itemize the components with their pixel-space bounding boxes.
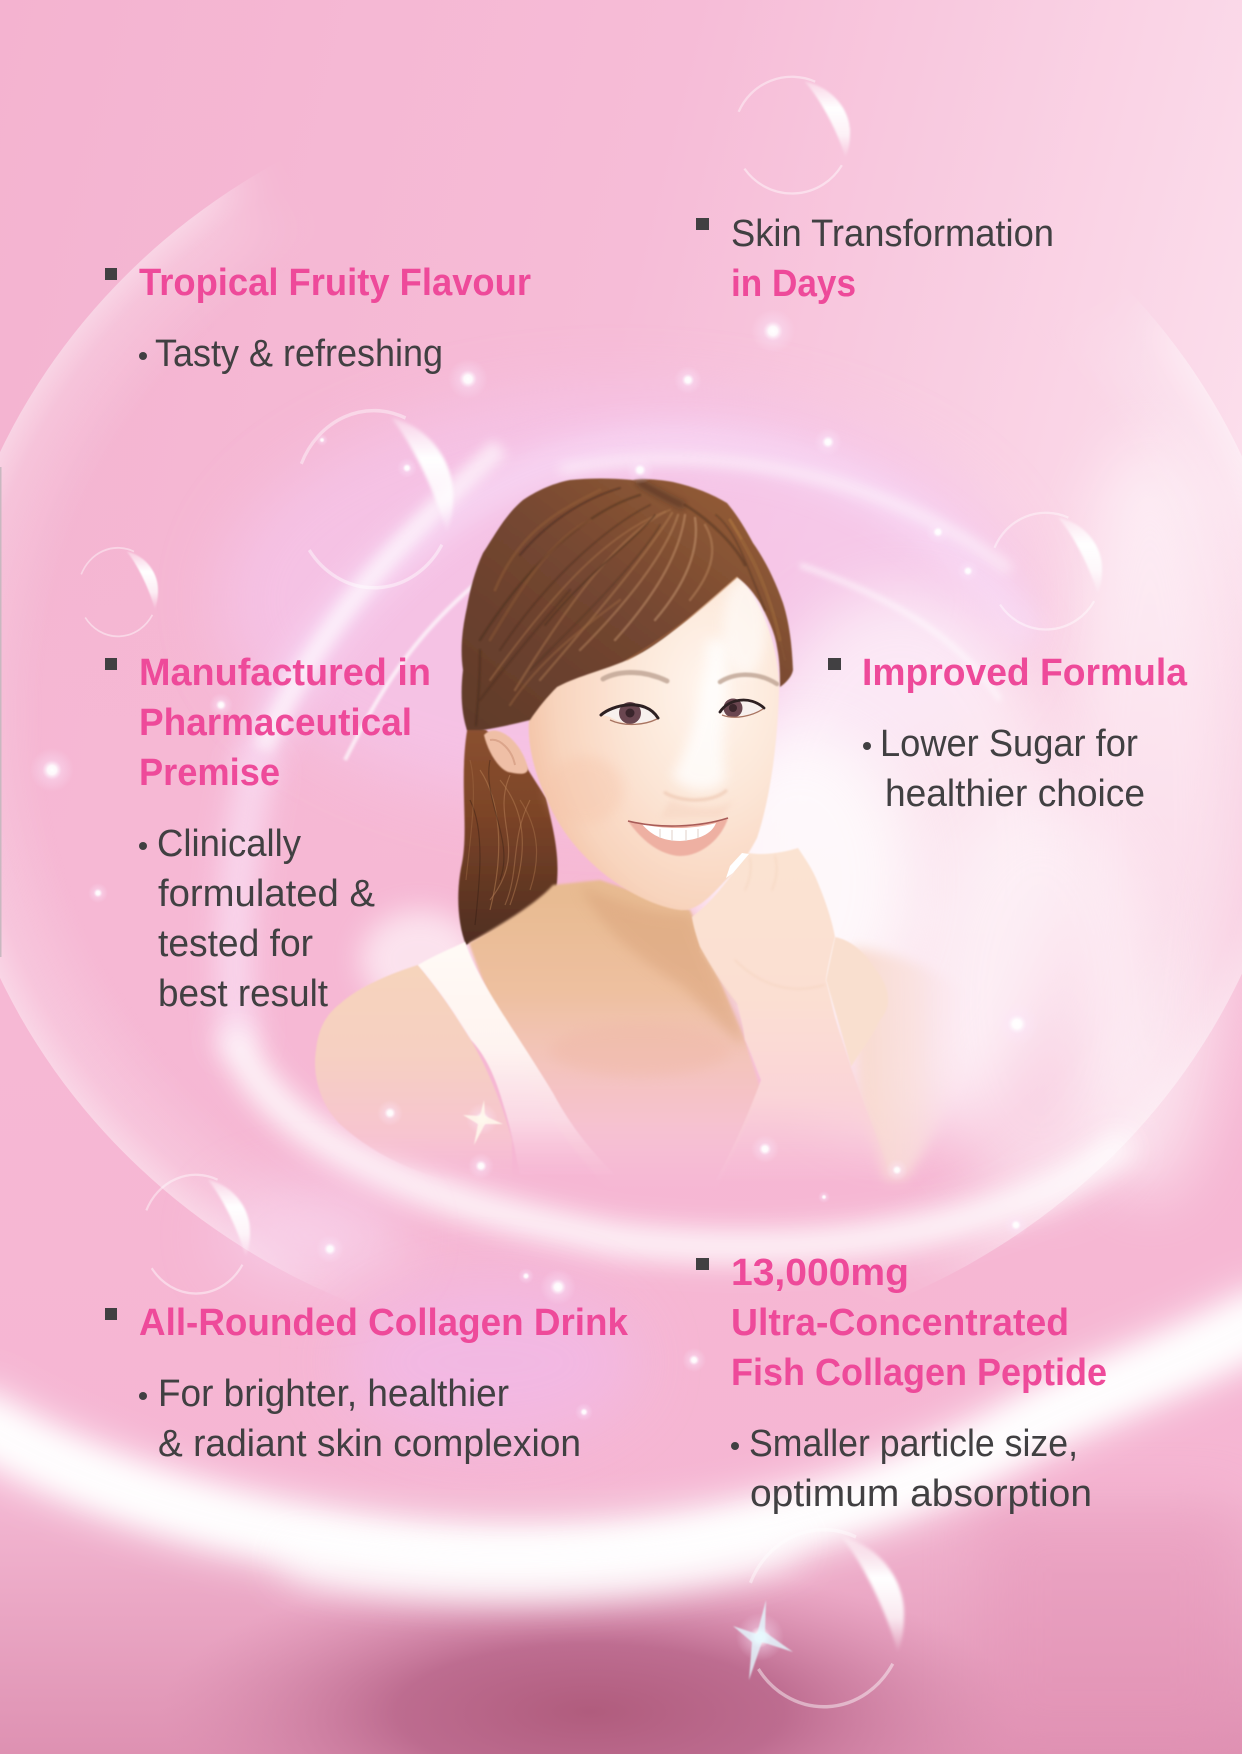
left arm	[315, 965, 512, 1195]
text: Manufactured in Pharmaceutical Premise: Manufactured in	[139, 652, 431, 694]
text: 13,000mg Ultra-Concentrated Fish Collagen Peptide: 13,000mg	[731, 1252, 909, 1294]
nose and forehead highlight	[672, 640, 727, 790]
bubbles	[81, 77, 1102, 1707]
text: Manufactured in Pharmaceutical Premise: best result	[158, 973, 328, 1015]
text: All-Rounded Collagen Drink: & radiant skin complexion	[158, 1423, 581, 1465]
text: Manufactured in Pharmaceutical Premise: Premise	[139, 752, 280, 794]
text: Manufactured in Pharmaceutical Premise	[105, 652, 431, 1015]
text: Improved Formula: healthier choice	[885, 773, 1145, 815]
hair	[462, 478, 793, 730]
text: Tropical Fruity Flavour	[105, 262, 531, 375]
knuckle shading	[700, 856, 824, 1005]
star flare: shoulder	[463, 1100, 503, 1145]
ear	[484, 730, 528, 774]
background	[0, 0, 1242, 1276]
right arm fading	[851, 947, 971, 1180]
text: 13,000mg Ultra-Concentrated Fish Collagen Peptide: optimum absorption	[750, 1473, 1092, 1515]
text: 13,000mg Ultra-Concentrated Fish Collagen Peptide: Smaller particle size,	[749, 1423, 1078, 1465]
fist and forearm	[692, 848, 892, 1180]
bubble: small left	[81, 548, 158, 636]
bubble: right	[994, 513, 1102, 629]
second hand	[826, 937, 888, 1067]
text: Manufactured in Pharmaceutical Premise: formulated &	[158, 873, 375, 915]
text: All-Rounded Collagen Drink: All-Rounded Collagen Drink	[139, 1302, 629, 1344]
text: Improved Formula	[828, 652, 1188, 815]
star flare: bottom	[733, 1600, 793, 1680]
text: Manufactured in Pharmaceutical Premise: tested for	[158, 923, 313, 965]
text: Skin Transformation in Days: Skin Transformation	[731, 213, 1054, 255]
text: 13,000mg Ultra-Concentrated Fish Collagen Peptide: Ultra-Concentrated	[731, 1302, 1069, 1344]
bubble: upper centre-left	[301, 411, 453, 588]
text: All-Rounded Collagen Drink: For brighter, healthier	[158, 1373, 509, 1415]
text: Tropical Fruity Flavour: Tasty & refreshing	[155, 333, 443, 375]
eyebrows	[603, 672, 777, 684]
text: Tropical Fruity Flavour: Tropical Fruity Flavour	[139, 262, 531, 304]
text: Skin Transformation in Days	[696, 213, 1054, 305]
top strap	[418, 942, 615, 1175]
text: Skin Transformation in Days: in Days	[731, 263, 856, 305]
text: Manufactured in Pharmaceutical Premise: Clinically	[157, 823, 301, 865]
hair part and strands	[476, 483, 785, 725]
text: 13,000mg Ultra-Concentrated Fish Collagen Peptide	[696, 1252, 1107, 1515]
face	[529, 555, 779, 910]
neck shadow	[580, 885, 745, 1045]
right eye	[720, 698, 764, 718]
ponytail	[458, 725, 558, 945]
chest and neck	[469, 880, 761, 1190]
text: Improved Formula: Lower Sugar for	[880, 723, 1138, 765]
left eye	[601, 702, 658, 724]
swirl light rings	[220, 390, 1160, 1442]
text: Manufactured in Pharmaceutical Premise: Pharmaceutical	[139, 702, 412, 744]
text: 13,000mg Ultra-Concentrated Fish Collagen Peptide: Fish Collagen Peptide	[731, 1352, 1107, 1394]
woman portrait	[315, 478, 971, 1195]
text: All-Rounded Collagen Drink	[105, 1302, 629, 1465]
bubble: top right	[739, 77, 850, 193]
bubble: bottom right	[750, 1530, 904, 1707]
smile	[628, 818, 728, 856]
halo behind portrait	[690, 730, 910, 1030]
bubble: lower left	[146, 1175, 250, 1294]
sparkles	[30, 309, 1039, 1680]
bottom stage and white crescent	[0, 1310, 1242, 1754]
text: Improved Formula: Improved Formula	[862, 652, 1188, 694]
white chin gap	[726, 853, 749, 878]
